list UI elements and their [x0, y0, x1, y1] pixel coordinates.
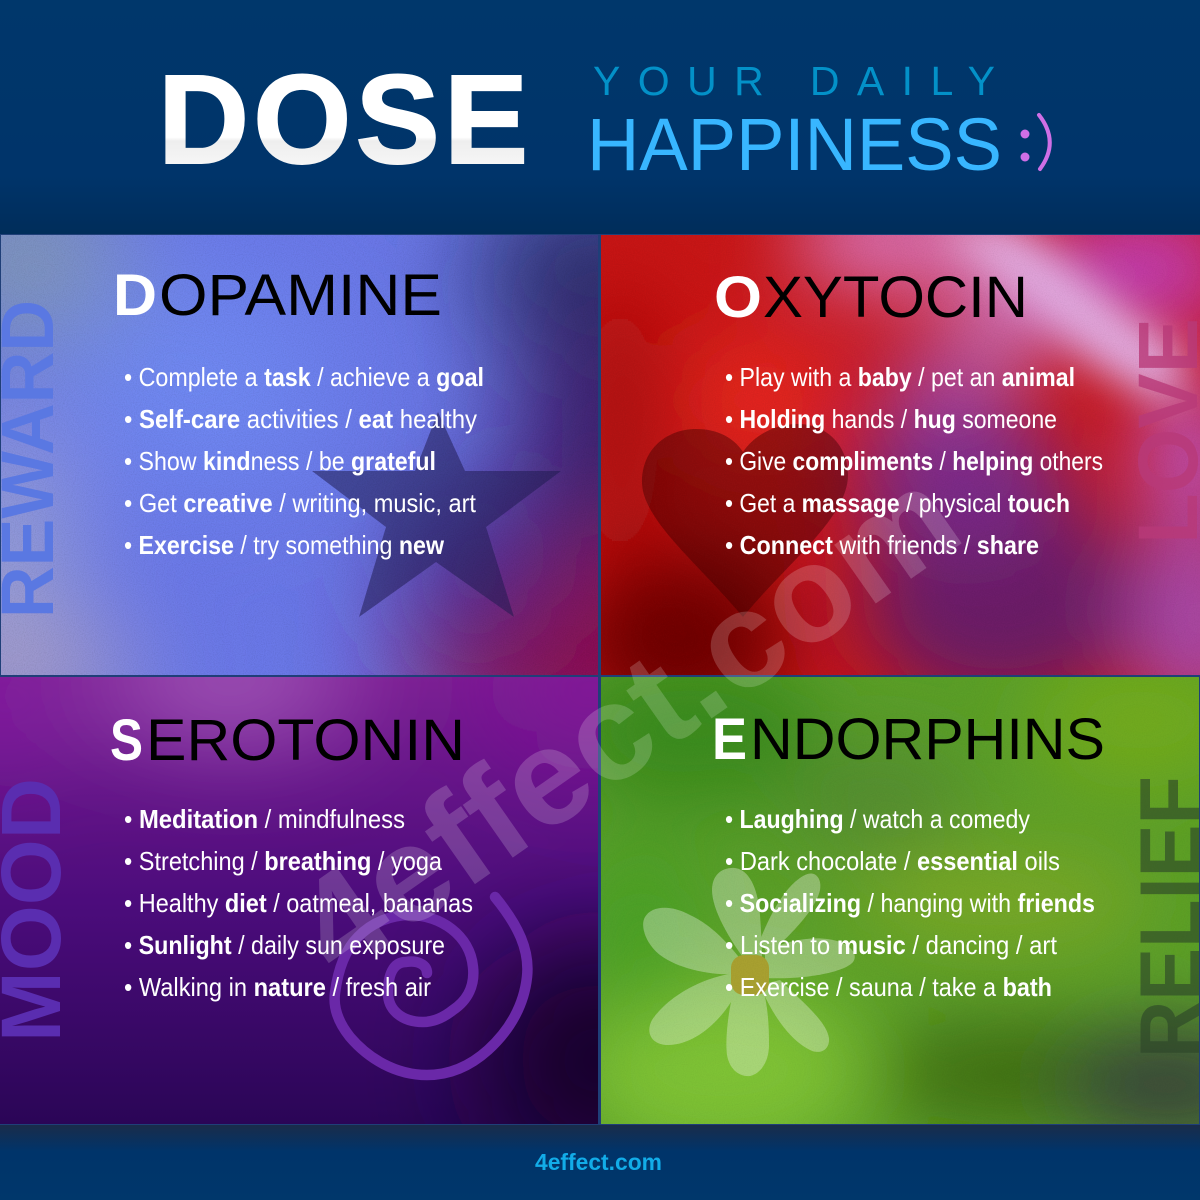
- panel: dopamine: [1, 235, 598, 675]
- list: dopamine: • Exercise / try something new: [124, 530, 445, 560]
- heading: OXYTOCIN: XYTOCIN: [763, 265, 1028, 330]
- list: dopamine: • Show kindness / be grateful: [124, 446, 436, 476]
- list: serotonin: • Walking in nature / fresh air: [124, 972, 431, 1002]
- icon: flower: [643, 868, 855, 1076]
- list: endorphins: • Socializing / hanging with friends: [725, 888, 1095, 918]
- list: dopamine: • Get creative / writing, music, art: [124, 488, 477, 518]
- list: serotonin: • Healthy diet / oatmeal, bananas: [124, 888, 473, 918]
- list: oxytocin: • Get a massage / physical touch: [725, 488, 1070, 518]
- footer: [0, 1125, 1200, 1200]
- heading: SEROTONIN: S: [110, 708, 143, 773]
- panel: serotonin: [0, 677, 598, 1124]
- list: endorphins: • Listen to music / dancing / art: [725, 930, 1058, 960]
- list: serotonin: [124, 804, 473, 1002]
- subtitle: YOUR DAILY: YOUR DAILY: [593, 58, 995, 104]
- list: dopamine: [124, 362, 484, 560]
- list: oxytocin: • Connect with friends / share: [725, 530, 1039, 560]
- heading: SEROTONIN: EROTONIN: [146, 708, 465, 773]
- smiley: [1020, 115, 1050, 169]
- list: serotonin: • Sunlight / daily sun exposure: [124, 930, 445, 960]
- heading: ENDORPHINS: E: [712, 707, 747, 772]
- list: oxytocin: • Play with a baby / pet an animal: [725, 362, 1075, 392]
- heading: ENDORPHINS: NDORPHINS: [750, 707, 1105, 772]
- list: dopamine: • Self-care activities / eat healthy: [124, 404, 477, 434]
- list: oxytocin: • Give compliments / helping others: [725, 446, 1103, 476]
- list: endorphins: • Laughing / watch a comedy: [725, 804, 1030, 834]
- subtitle: HAPPINESS: HAPPINESS: [587, 103, 1002, 186]
- list: endorphins: [725, 804, 1095, 1002]
- watermark: 4effect.com: [267, 438, 985, 1004]
- list: oxytocin: [725, 362, 1103, 560]
- panel: endorphins: [601, 677, 1199, 1124]
- list: endorphins: • Exercise / sauna / take a bath: [725, 972, 1052, 1002]
- list: endorphins: • Dark chocolate / essential oils: [725, 846, 1060, 876]
- icon: spiral: [335, 897, 527, 1075]
- list: serotonin: • Stretching / breathing / yoga: [124, 846, 442, 876]
- list: dopamine: • Complete a task / achieve a goal: [124, 362, 484, 392]
- header band: [0, 0, 1200, 234]
- panel: oxytocin: [601, 235, 1200, 675]
- title: DOSE: DOSE: [158, 49, 528, 190]
- list: serotonin: • Meditation / mindfulness: [124, 804, 405, 834]
- icon: heart: [642, 424, 848, 617]
- list: oxytocin: • Holding hands / hug someone: [725, 404, 1057, 434]
- heading: OXYTOCIN: O: [714, 265, 762, 330]
- footer link text: 4effect.com: [535, 1149, 662, 1175]
- heading: DOPAMINE: OPAMINE: [159, 263, 442, 328]
- heading: DOPAMINE: D: [113, 263, 157, 328]
- icon: star: [312, 412, 561, 617]
